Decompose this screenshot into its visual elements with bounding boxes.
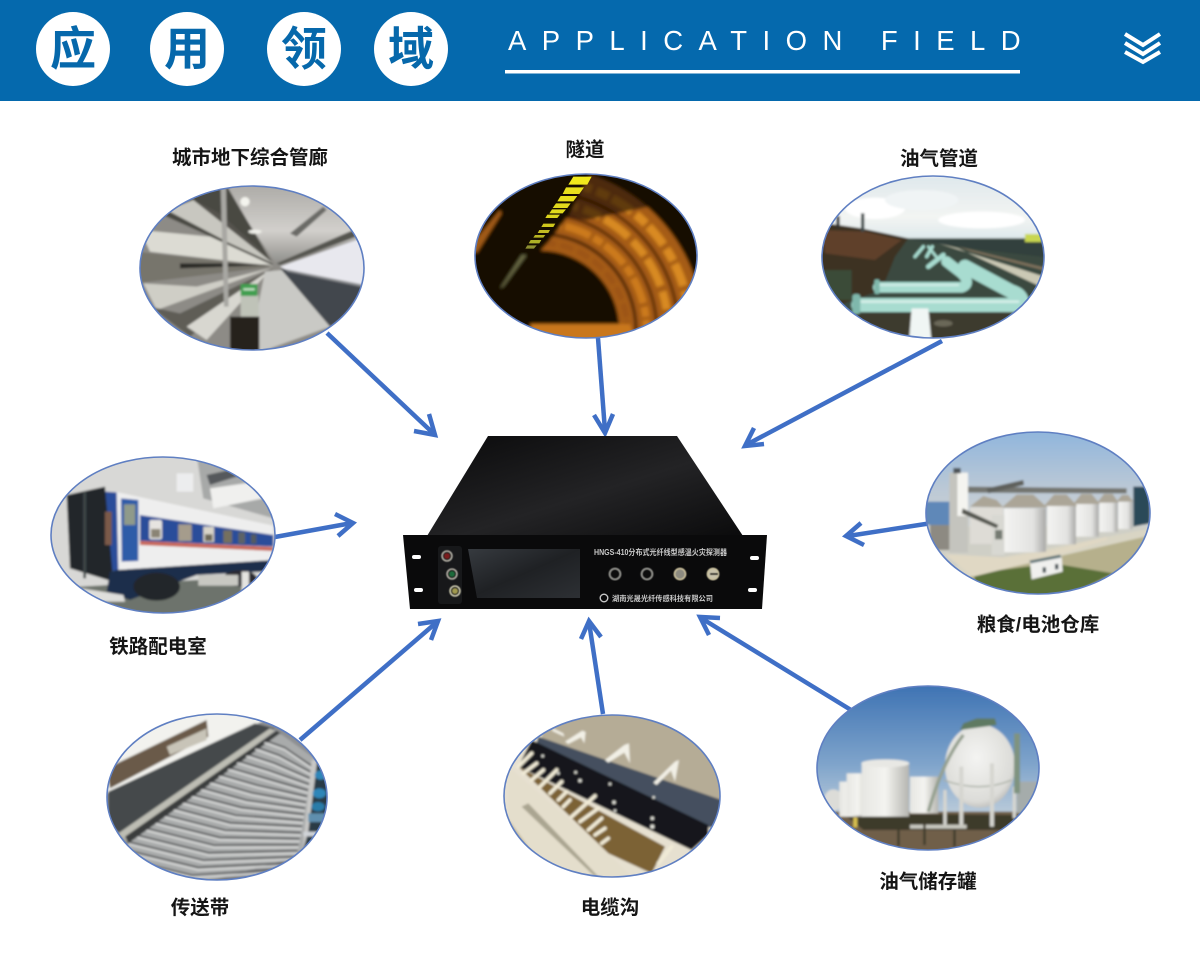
photo: storage tanks — [818, 686, 1038, 850]
title character circle: 域 — [374, 12, 448, 86]
arrow: oil pipeline to device — [745, 341, 942, 446]
photo: conveyor belt — [108, 715, 326, 880]
arrow: grain warehouse to device — [846, 523, 932, 545]
english heading: APPLICATION FIELD — [508, 25, 1036, 56]
title character circle: 领 — [267, 12, 341, 86]
arrow: railway to device — [275, 514, 353, 537]
title character circle: 领: 领 — [281, 23, 327, 75]
title character circle: 用 — [150, 12, 224, 86]
label: grain and battery warehouse: 粮食/电池仓库 — [977, 613, 1099, 636]
ellipse outline — [926, 432, 1150, 594]
photo: cable trench — [504, 716, 720, 876]
device front panel — [403, 535, 767, 609]
arrow: oil storage to device — [700, 617, 851, 710]
ellipse outline — [822, 176, 1044, 338]
photo: road tunnel — [476, 174, 696, 338]
icon: triple chevron — [1125, 34, 1160, 62]
panel: utility tunnel — [130, 146, 370, 355]
arrow: conveyor to device — [300, 621, 438, 740]
header band — [0, 0, 1200, 101]
device status lights — [442, 551, 460, 596]
device touch screen — [468, 549, 580, 598]
label: utility tunnel: 城市地下综合管廊 — [172, 146, 328, 169]
title character circle: 应 — [36, 12, 110, 86]
panel: cable trench — [503, 714, 721, 916]
label: railway power room: 铁路配电室 — [109, 635, 207, 658]
photo: utility tunnel — [140, 186, 364, 350]
panel: road tunnel — [474, 139, 698, 339]
device model text: HNGS-410分布式光纤线型感温火灾探测器 — [594, 547, 727, 557]
panel: oil pipeline — [821, 148, 1045, 339]
label: conveyor belt: 传送带 — [171, 897, 229, 919]
ellipse outline — [504, 715, 720, 877]
label: road tunnel: 隧道 — [565, 138, 605, 161]
device buttons — [610, 568, 718, 580]
arrow: road tunnel to device — [594, 338, 613, 433]
panel: oil and gas storage tanks — [810, 680, 1050, 893]
label: oil pipeline: 油气管道 — [900, 147, 978, 170]
ellipse outline — [107, 714, 327, 880]
ellipse outline — [475, 174, 697, 338]
title character circle: 域: 域 — [388, 23, 434, 75]
arrow: cable trench to device — [581, 621, 603, 714]
ellipse outline — [51, 457, 275, 613]
photo: oil pipeline — [822, 177, 1044, 338]
device company logo and name: 湖南光晟光纤传感科技有限公司 — [612, 594, 713, 603]
label: cable trench: 电缆沟 — [581, 897, 639, 919]
heading underline — [505, 70, 1020, 74]
panel: railway power room — [50, 455, 285, 658]
panel: conveyor belt — [100, 710, 333, 919]
device chassis top — [427, 436, 743, 536]
ellipse outline — [817, 686, 1039, 850]
ellipse outline — [140, 186, 364, 350]
arrow: tunnel utility to device — [327, 333, 435, 435]
label: oil and gas storage tanks: 油气储存罐 — [879, 871, 977, 893]
photo: railway carriage — [50, 455, 285, 615]
photo: grain silos — [926, 432, 1150, 594]
title character circle: 应: 应 — [50, 23, 96, 75]
title character circle: 用: 用 — [164, 23, 210, 75]
panel: grain and battery warehouse — [920, 430, 1160, 636]
central device: fiber-optic fire detector — [403, 436, 767, 609]
